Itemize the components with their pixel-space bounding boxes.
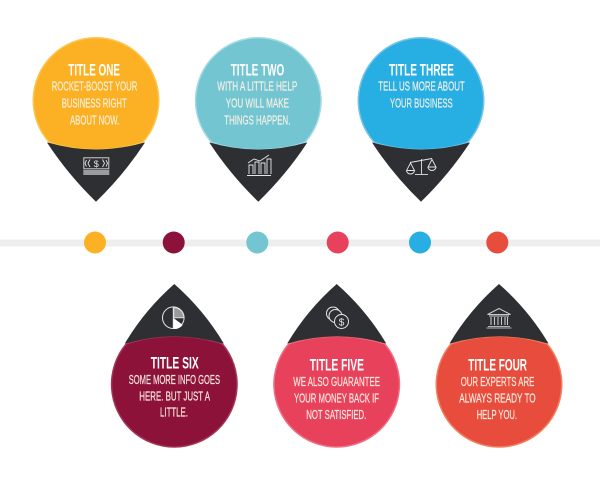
panel: title one pin — [32, 37, 160, 202]
text block — [459, 374, 536, 422]
heading: TITLE THREE — [389, 61, 454, 80]
text block: YOU WILL MAKE — [226, 95, 289, 110]
icon: bank — [486, 308, 512, 328]
heading: TITLE SIX — [151, 354, 199, 373]
text block — [217, 79, 297, 127]
text block — [129, 372, 220, 420]
text block: TELL US MORE ABOUT — [378, 79, 465, 94]
text block: WITH A LITTLE HELP — [217, 79, 297, 94]
heading: TITLE FIVE — [310, 356, 364, 375]
text block: ROCKET-BOOST YOUR — [52, 79, 137, 94]
icon: scales — [406, 158, 436, 174]
icon: bar chart — [247, 155, 271, 176]
text block — [293, 374, 380, 422]
text block: THINGS HAPPEN. — [224, 112, 290, 127]
text block: HERE. BUT JUST A — [139, 389, 210, 404]
icon: pie chart — [162, 307, 184, 329]
heading: TITLE TWO — [231, 61, 284, 80]
text block: HELP YOU. — [477, 407, 517, 422]
icon: banknote — [83, 158, 109, 175]
heading: TITLE FOUR — [468, 356, 527, 375]
timeline track — [0, 240, 600, 246]
text block: YOUR BUSINESS — [390, 95, 453, 110]
text block: LITTLE. — [160, 405, 188, 420]
text block: BUSINESS RIGHT — [62, 95, 127, 110]
icon: coins — [326, 307, 348, 328]
text block: ABOUT NOW. — [70, 112, 119, 127]
text block: WE ALSO GUARANTEE — [293, 374, 380, 389]
panel: title five drop — [273, 284, 400, 448]
panel: title four drop — [436, 284, 562, 448]
panel: title six drop — [111, 284, 238, 448]
text block: OUR EXPERTS ARE — [461, 374, 534, 389]
panel: title three pin — [358, 37, 484, 202]
icon: banknote: $ — [94, 159, 99, 169]
icon: coins: $ — [339, 318, 345, 328]
text block: SOME MORE INFO GOES — [129, 372, 220, 387]
text block: NOT SATISFIED. — [306, 407, 366, 422]
text block: YOUR MONEY BACK IF — [294, 390, 379, 405]
text block: ALWAYS READY TO — [459, 390, 536, 405]
text block — [378, 79, 465, 110]
heading: TITLE ONE — [68, 61, 120, 80]
timeline dots — [84, 232, 508, 254]
panel: title two pin — [195, 37, 322, 202]
text block — [52, 79, 137, 127]
